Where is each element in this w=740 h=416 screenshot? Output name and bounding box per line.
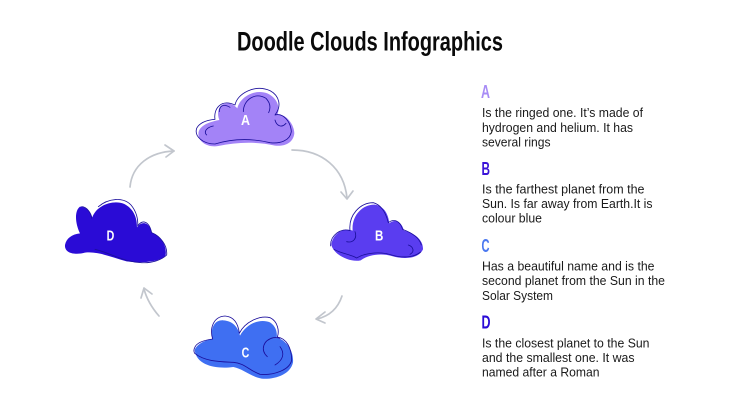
label A: A [241, 113, 250, 129]
title: Doodle Clouds Infographics [237, 26, 503, 56]
text block A: Is the ringed one. It’s made of [482, 105, 643, 120]
text block D [482, 312, 650, 380]
label C: C [242, 345, 250, 361]
label B: B [375, 229, 383, 245]
arrow: B to C [316, 296, 342, 323]
text block B [482, 159, 652, 226]
text block C: Has a beautiful name and is the [482, 258, 654, 274]
text block A: A [481, 82, 490, 102]
cloud B [331, 203, 423, 261]
text block C: Solar System [482, 288, 553, 303]
text block C [482, 236, 665, 303]
text block A: hydrogen and helium. It has [482, 120, 633, 135]
text block C: C [482, 236, 490, 256]
text block D: and the smallest one. It was [482, 350, 634, 365]
text block B: B [482, 159, 490, 179]
text block B: colour blue [482, 210, 542, 226]
cloud D [65, 200, 167, 263]
text block D: Is the closest planet to the Sun [482, 336, 650, 350]
text block B: Sun. Is far away from Earth.It is [482, 196, 652, 211]
text block D: named after a Roman [482, 364, 600, 380]
text block C: second planet from the Sun in the [482, 273, 665, 288]
text block A [481, 82, 643, 150]
arrow: A to B [292, 150, 353, 199]
label D: D [107, 229, 114, 245]
text block A: several rings [482, 134, 550, 150]
cloud A [196, 88, 294, 146]
text block D: D [482, 312, 490, 332]
cloud C [194, 316, 293, 379]
arrow: D to A [130, 145, 174, 187]
text block B: Is the farthest planet from the [482, 182, 644, 196]
arrow: C to D [141, 288, 159, 316]
